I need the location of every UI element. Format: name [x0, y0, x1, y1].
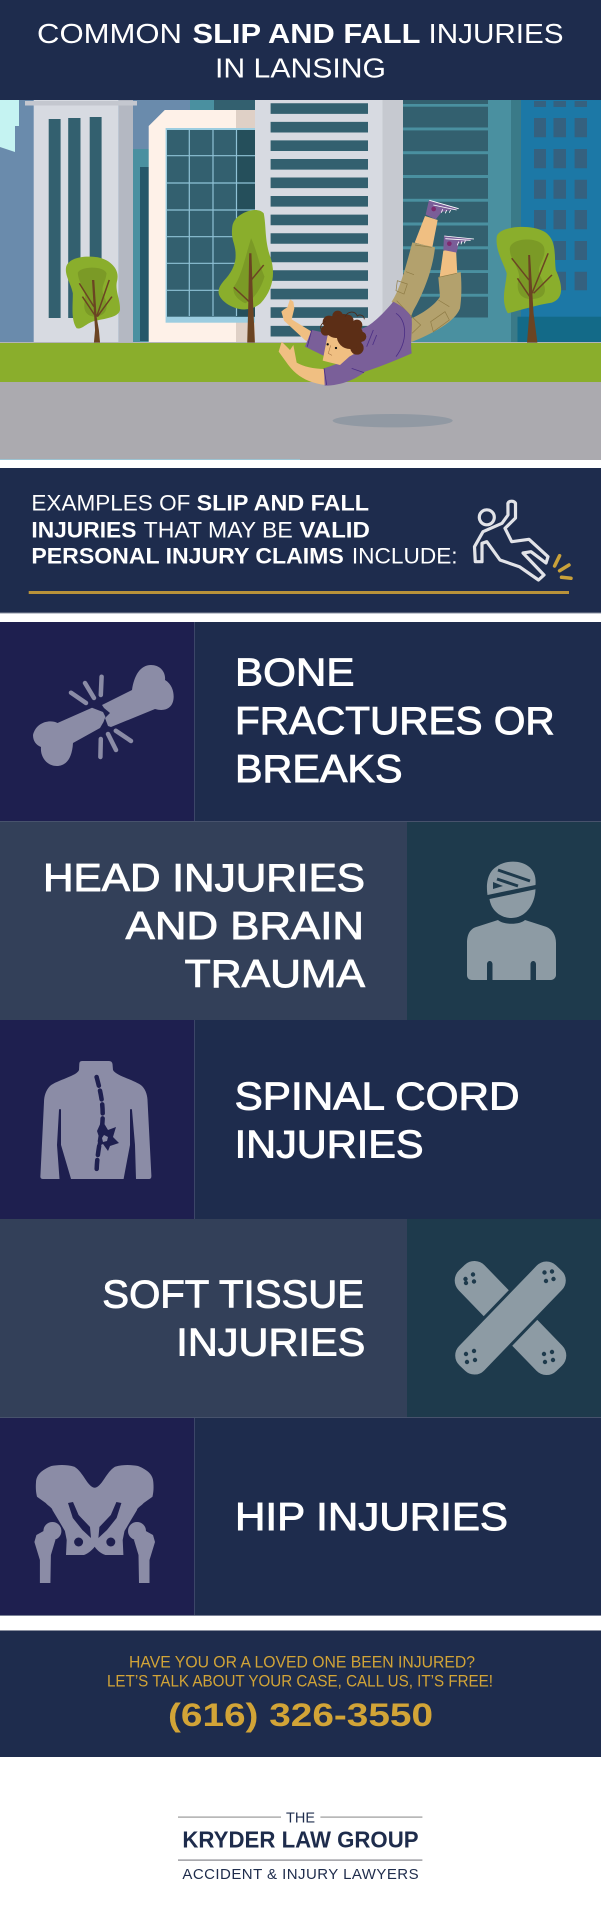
label: head injuries and brain trauma: AND BRAIN — [126, 905, 364, 948]
label: soft tissue injuries — [102, 1274, 365, 1365]
intro text: THAT MAY BE — [144, 518, 293, 543]
falling person — [279, 200, 474, 427]
intro text: INJURIES — [31, 518, 136, 543]
label: spinal cord injuries: SPINAL CORD — [235, 1076, 520, 1119]
row: soft tissue injuries — [0, 1219, 601, 1418]
title banner: IN LANSING — [215, 53, 386, 84]
label: bone fractures or breaks: BONE — [235, 652, 354, 695]
icon: crossed bandages — [448, 1254, 573, 1382]
label: bone fractures or breaks — [235, 652, 555, 791]
label: soft tissue injuries: INJURIES — [176, 1322, 365, 1365]
intro text: EXAMPLES OF — [31, 491, 190, 516]
logo: The Kryder Law Group: ACCIDENT & INJURY LAWYERS — [182, 1866, 419, 1883]
label: spinal cord injuries — [235, 1076, 520, 1167]
icon: slipping figure — [474, 501, 571, 580]
icon: bandaged head — [467, 862, 556, 980]
intro text: SLIP AND FALL — [197, 491, 369, 516]
icon: back with injured spine — [40, 1061, 151, 1179]
logo: The Kryder Law Group: THE — [286, 1809, 315, 1826]
logo: The Kryder Law Group: KRYDER LAW GROUP — [182, 1826, 419, 1852]
intro panel — [0, 468, 601, 614]
label: bone fractures or breaks: BREAKS — [235, 748, 402, 791]
logo: The Kryder Law Group — [178, 1809, 422, 1883]
label: bone fractures or breaks: FRACTURES OR — [235, 700, 555, 743]
row: hip injuries — [0, 1418, 601, 1616]
intro text: VALID — [299, 518, 370, 543]
label: head injuries and brain trauma — [43, 857, 365, 996]
icon: pelvis — [34, 1465, 155, 1583]
row: head injuries — [0, 821, 601, 1020]
call to action panel — [0, 1630, 601, 1757]
call to action text: HAVE YOU OR A LOVED ONE BEEN INJURED? — [129, 1653, 475, 1672]
intro text: PERSONAL INJURY CLAIMS — [31, 544, 344, 569]
intro text: INCLUDE: — [352, 544, 458, 569]
tree 1 — [66, 257, 120, 343]
title banner — [0, 0, 601, 100]
call to action text: LET’S TALK ABOUT YOUR CASE, CALL US, IT’S FREE! — [107, 1671, 493, 1690]
label: hip injuries: HIP INJURIES — [235, 1496, 508, 1539]
row: bone fractures — [0, 622, 601, 821]
intro text — [31, 491, 458, 569]
label: head injuries and brain trauma: HEAD INJURIES — [43, 857, 365, 900]
row: spinal cord injuries — [0, 1020, 601, 1219]
title banner: COMMON — [37, 18, 182, 49]
title banner: INJURIES — [428, 18, 564, 49]
tree 2 — [219, 210, 273, 343]
tree 3 — [497, 227, 561, 343]
label: spinal cord injuries: INJURIES — [235, 1124, 424, 1167]
phone number: (616) 326-3550 — [168, 1697, 433, 1733]
label: soft tissue injuries: SOFT TISSUE — [102, 1274, 364, 1317]
label: head injuries and brain trauma: TRAUMA — [185, 953, 365, 996]
illustration: person slipping on city street — [0, 100, 601, 460]
icon: broken bone — [33, 665, 174, 766]
title banner: SLIP AND FALL — [192, 18, 420, 49]
call to action text — [107, 1653, 493, 1690]
